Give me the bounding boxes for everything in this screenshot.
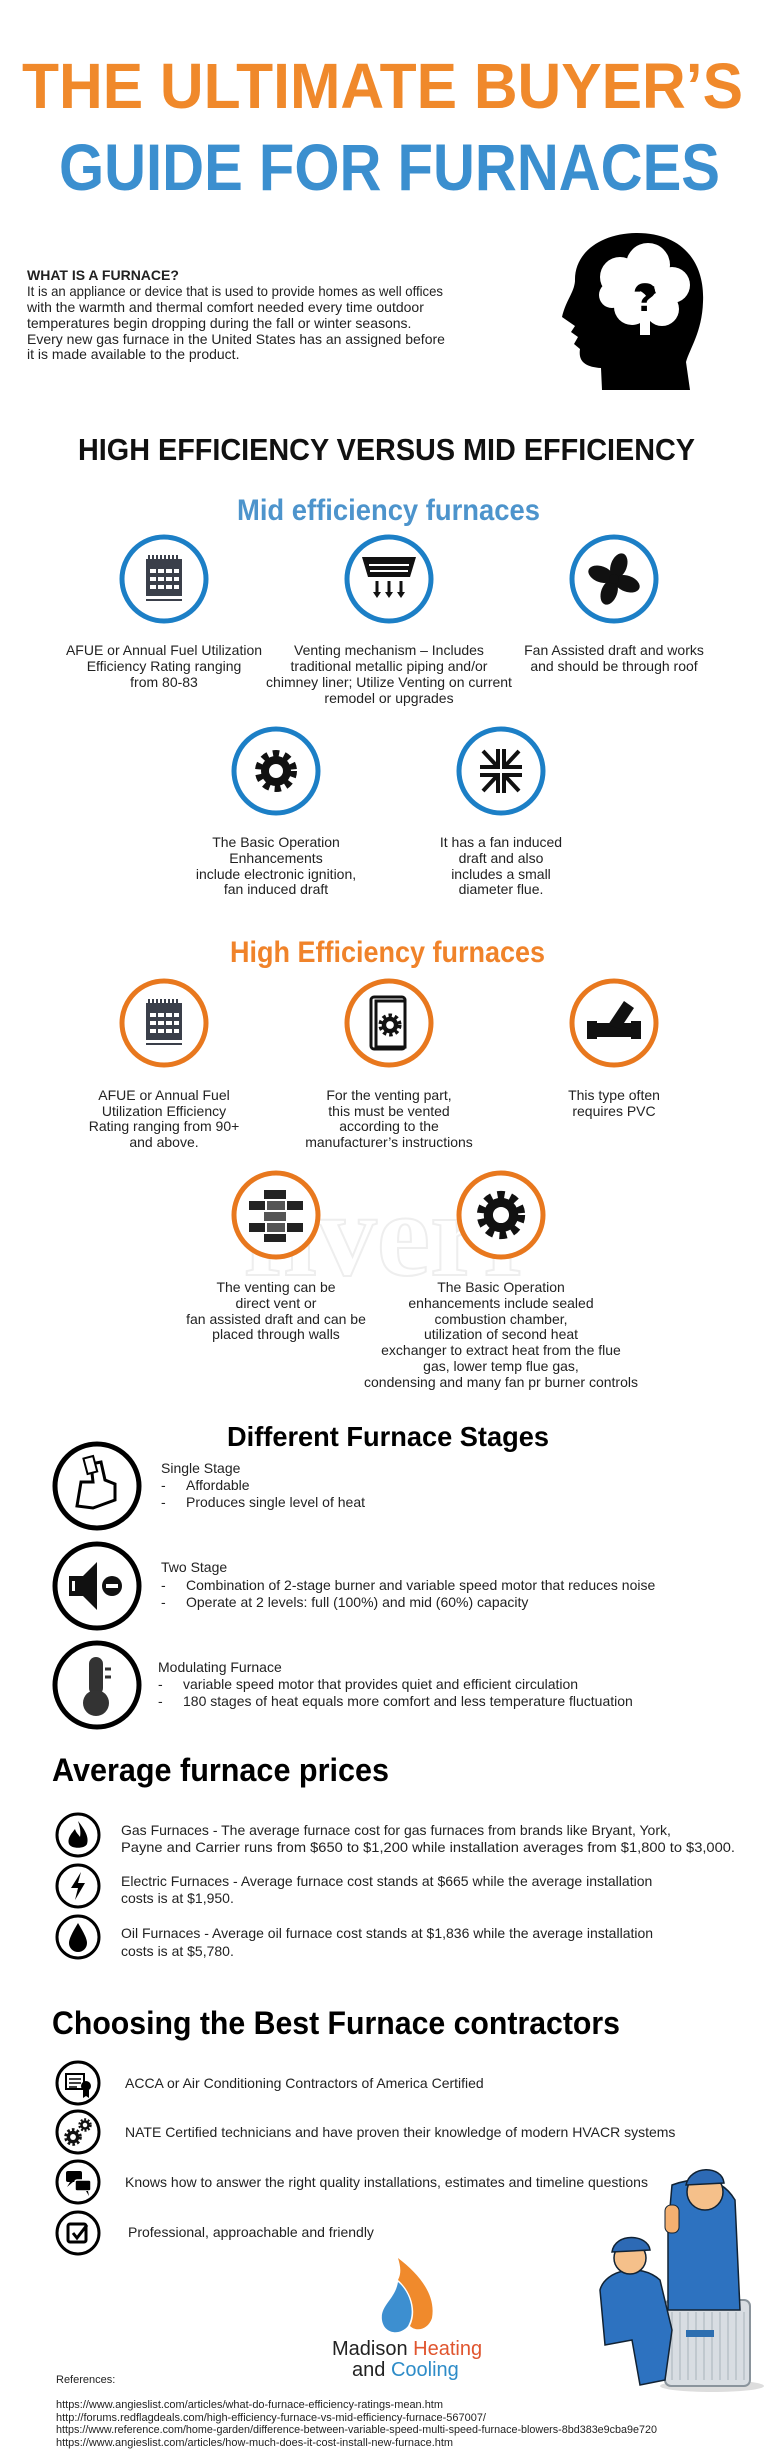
text: fan induced: [440, 834, 562, 897]
icon: bolt: [57, 1865, 99, 1907]
text: venting walls: placed through walls: [212, 1326, 340, 1342]
text: knows: Knows how to answer the right quality installations, estimates and timeline questions: [125, 2174, 648, 2190]
title: [22, 50, 743, 204]
text: pvc: [568, 1087, 660, 1119]
text: nate: NATE Certified technicians and have proven their knowledge of modern HVACR systems: [125, 2124, 675, 2140]
text: basic op high: combustion chamber,: [434, 1311, 568, 1327]
text: basic op high: condensing and many fan pr burner controls: [364, 1374, 638, 1390]
text: afue mid: AFUE or Annual Fuel Utilization: [66, 642, 262, 658]
text: oil: Oil Furnaces - Average oil furnace cost stands at $1,836 while the average installation: [121, 1925, 653, 1941]
text: two stage: [161, 1559, 655, 1610]
text: afue mid: Efficiency Rating ranging: [87, 658, 241, 674]
icon: checkbox: [57, 2212, 99, 2254]
text: afue high: [89, 1087, 239, 1150]
text: two stage: Operate at 2 levels: full (100%) and mid (60%) capacity: [186, 1594, 528, 1610]
text: venting mid: traditional metallic piping and/or: [291, 658, 488, 674]
icon: gears: [57, 2111, 99, 2153]
text: venting mid: remodel or upgrades: [324, 690, 454, 706]
text: afue high: AFUE or Annual Fuel: [98, 1087, 230, 1103]
panel: prices: [57, 1814, 735, 1959]
text: venting mid: Venting mechanism – Includes: [294, 642, 484, 658]
icon: fan: [572, 537, 656, 621]
illustration: technicians with ac unit: [600, 2170, 764, 2392]
text: venting walls: fan assisted draft and can be: [186, 1311, 366, 1327]
icon: bricks: [234, 1173, 318, 1257]
icon: calendar orange: [122, 981, 206, 1065]
text block: what is a furnace: with the warmth and thermal comfort needed every time outdoor: [26, 299, 424, 315]
icon: pvc pipe: [572, 981, 656, 1065]
logo: madison heating and cooling: and Cooling: [352, 2359, 459, 2381]
text: gas: Gas Furnaces - The average furnace cost for gas furnaces from brands like Bryant, York,: [121, 1822, 671, 1838]
text: fan induced: includes a small: [451, 866, 551, 882]
text block: what is a furnace: Every new gas furnace in the United States has an assigned before: [27, 331, 445, 347]
text block: what is a furnace: [26, 267, 445, 362]
text: two stage: Two Stage: [161, 1559, 227, 1575]
logo: madison heating and cooling: Madison Heating: [332, 2338, 482, 2360]
text: basic op high: The Basic Operation: [437, 1279, 565, 1295]
icon: speaker: [55, 1544, 139, 1628]
text: afue mid: from 80-83: [130, 674, 198, 690]
panel: high efficiency items: [89, 981, 660, 1390]
icon: calendar blue: [122, 537, 206, 621]
icon: vent: [347, 537, 431, 621]
text: venting walls: direct vent or: [236, 1295, 317, 1311]
text: basic op mid: include electronic ignition,: [196, 866, 356, 882]
text: single stage: Single Stage: [161, 1460, 241, 1476]
text: two stage: -: [161, 1594, 166, 1610]
text: electric: Electric Furnaces - Average furnace cost stands at $665 while the average installation: [121, 1873, 652, 1889]
text: single stage: Affordable: [186, 1477, 250, 1493]
text: gas: Payne and Carrier runs from $650 to $1,200 while installation averages from $1,800 to $3,000.: [121, 1839, 735, 1855]
text: afue high: Utilization Efficiency: [102, 1103, 226, 1119]
text: modulating: 180 stages of heat equals more comfort and less temperature fluctuation: [183, 1693, 633, 1709]
heading: furnace stages: Different Furnace Stages: [227, 1421, 549, 1452]
text: basic op high: enhancements include sealed: [408, 1295, 594, 1311]
text: venting mid: [266, 642, 512, 706]
text: basic op high: exchanger to extract heat from the flue: [381, 1342, 621, 1358]
text: single stage: [161, 1460, 365, 1510]
text: basic op high: [364, 1279, 638, 1390]
text: venting high: [305, 1087, 473, 1150]
heading: prices: Average furnace prices: [52, 1752, 389, 1788]
text block: what is a furnace: it is made available to the product.: [27, 346, 239, 362]
watermark: fiverr: [243, 1168, 537, 1301]
text: modulating: Modulating Furnace: [158, 1659, 282, 1675]
references: References:: [56, 2374, 115, 2386]
references: https://www.angieslist.com/articles/what-do-furnace-efficiency-ratings-mean.htm: [56, 2399, 443, 2411]
text: modulating: -: [158, 1693, 163, 1709]
text: venting mid: chimney liner; Utilize Venting on current: [266, 674, 512, 690]
text: fan mid: [524, 642, 704, 674]
text: basic op mid: [196, 834, 356, 897]
text: professional: Professional, approachable and friendly: [128, 2224, 374, 2240]
icon: certificate: [57, 2062, 99, 2104]
icon: thermometer: [55, 1643, 139, 1727]
text: basic op mid: Enhancements: [229, 850, 323, 866]
text block: what is a furnace: WHAT IS A FURNACE?: [27, 267, 179, 283]
icon: head with question: ?: [633, 276, 657, 320]
references: http://forums.redflagdeals.com/high-efficiency-furnace-vs-mid-efficiency-furnace-567007/: [56, 2412, 487, 2424]
text: venting high: For the venting part,: [326, 1087, 452, 1103]
text: basic op mid: fan induced draft: [224, 881, 328, 897]
text: fan induced: It has a fan induced: [440, 834, 562, 850]
text: fan mid: and should be through roof: [530, 658, 698, 674]
icon: compress arrows: [459, 729, 543, 813]
text: electric: [121, 1873, 652, 1906]
text: modulating: variable speed motor that provides quiet and efficient circulation: [183, 1676, 578, 1692]
text: modulating: [158, 1659, 633, 1709]
icon: drop: [57, 1916, 99, 1958]
heading: high vs mid: HIGH EFFICIENCY VERSUS MID EFFICIENCY: [78, 432, 695, 467]
icon: chat: [57, 2161, 99, 2203]
text block: what is a furnace: temperatures begin dropping during the fall or winter seasons.: [27, 315, 411, 331]
text: venting high: according to the: [339, 1118, 439, 1134]
logo: madison heating and cooling: [332, 2258, 482, 2381]
icon: head with question: [562, 233, 703, 390]
text: two stage: -: [161, 1577, 166, 1593]
text: single stage: -: [161, 1494, 166, 1510]
title: THE ULTIMATE BUYER’S: [22, 50, 743, 122]
text: single stage: Produces single level of heat: [186, 1494, 365, 1510]
text: basic op mid: The Basic Operation: [212, 834, 340, 850]
text: modulating: -: [158, 1676, 163, 1692]
references: https://www.angieslist.com/articles/how-much-does-it-cost-install-new-furnace.htm: [56, 2437, 453, 2449]
icon: manual book: [347, 981, 431, 1065]
text: venting walls: The venting can be: [216, 1279, 336, 1295]
text: two stage: Combination of 2-stage burner and variable speed motor that reduces noise: [186, 1577, 655, 1593]
text: afue high: Rating ranging from 90+: [89, 1118, 239, 1134]
heading: contractors: Choosing the Best Furnace contractors: [52, 2005, 620, 2041]
text: electric: costs is at $1,950.: [121, 1890, 234, 1906]
icon: flame: [57, 1814, 99, 1856]
icon: gear orange: [459, 1173, 543, 1257]
panel: stages: [55, 1444, 655, 1727]
text: venting walls: [186, 1279, 366, 1342]
text: venting high: this must be vented: [328, 1103, 450, 1119]
text: basic op high: utilization of second heat: [424, 1326, 578, 1342]
panel: contractors: [57, 2062, 675, 2254]
text: single stage: -: [161, 1477, 166, 1493]
heading: mid efficiency: Mid efficiency furnaces: [237, 494, 540, 527]
text: afue high: and above.: [129, 1134, 199, 1150]
text: fan induced: draft and also: [459, 850, 544, 866]
text block: what is a furnace: It is an appliance or device that is used to provide homes as well offices: [27, 283, 443, 299]
text: basic op high: gas, lower temp flue gas,: [423, 1358, 579, 1374]
text: afue mid: [66, 642, 262, 690]
icon: gear blue: [234, 729, 318, 813]
references: https://www.reference.com/home-garden/difference-between-variable-speed-multi-speed-furnace-blowers-8bd383e9cba9e720: [56, 2424, 657, 2436]
text: fan induced: diameter flue.: [459, 881, 543, 897]
references: [56, 2374, 657, 2449]
text: pvc: requires PVC: [572, 1103, 656, 1119]
icon: hand money: [55, 1444, 139, 1528]
text: gas: [121, 1822, 735, 1855]
heading: high efficiency: High Efficiency furnaces: [230, 936, 545, 969]
text: venting high: manufacturer’s instructions: [305, 1134, 473, 1150]
panel: mid efficiency items: [66, 537, 704, 897]
text: fan mid: Fan Assisted draft and works: [524, 642, 704, 658]
text: oil: [121, 1925, 653, 1959]
text: acca: ACCA or Air Conditioning Contractors of America Certified: [125, 2075, 484, 2091]
text: oil: costs is at $5,780.: [121, 1943, 234, 1959]
text: pvc: This type often: [568, 1087, 660, 1103]
